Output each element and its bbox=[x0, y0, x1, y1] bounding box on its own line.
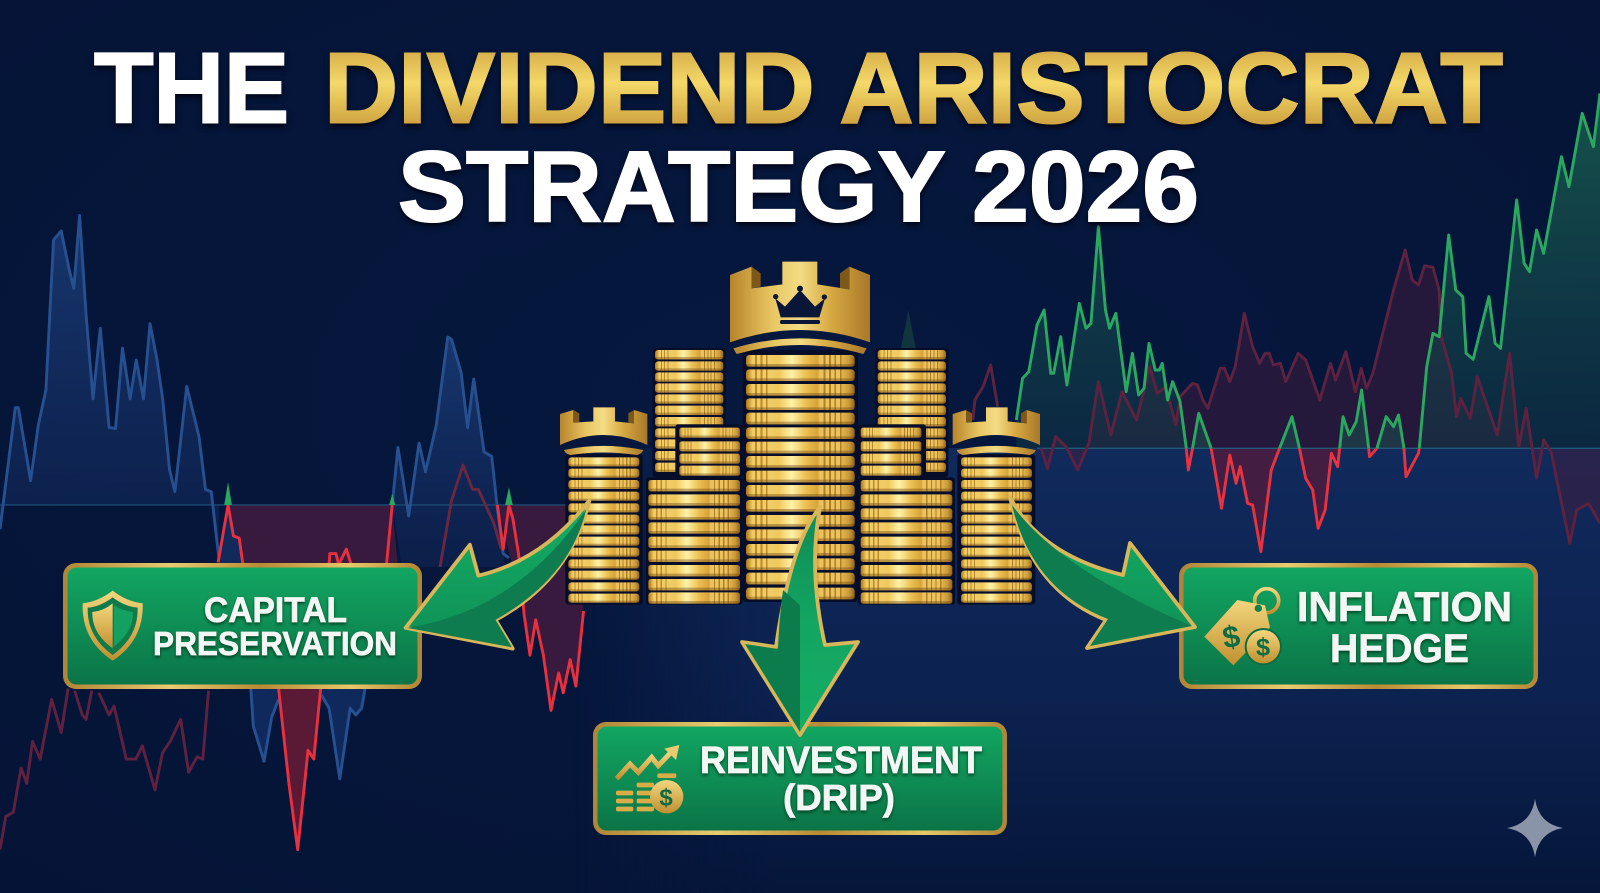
blue line lower bbox=[251, 686, 365, 779]
right tower battlement bbox=[953, 407, 1040, 445]
dim red line lower left bbox=[0, 688, 209, 850]
arrow: to inflation hedge bbox=[1010, 497, 1195, 648]
red zone fill bbox=[226, 505, 398, 567]
panel: inflation hedge bbox=[1179, 563, 1538, 689]
icon: price tag and coin: $ bbox=[1256, 634, 1270, 662]
right market chart bbox=[973, 93, 1600, 552]
dim red line upper bbox=[440, 465, 501, 567]
label: reinvestment drip: REINVESTMENT bbox=[700, 740, 982, 782]
icon: sparkle watermark bbox=[1507, 799, 1563, 857]
label: reinvestment drip bbox=[700, 740, 982, 818]
green mid area fill bbox=[1193, 390, 1404, 448]
central battlement crown bbox=[730, 262, 870, 342]
gold coin castle bbox=[560, 262, 1040, 605]
bright red line segments bbox=[1186, 448, 1419, 552]
icon: growth arrow and coins bbox=[616, 745, 683, 813]
icon: growth arrow and coins: $ bbox=[659, 784, 673, 811]
zero line left bbox=[0, 504, 570, 506]
label: reinvestment drip: (DRIP) bbox=[783, 777, 895, 818]
central coin tower bbox=[730, 262, 870, 602]
arrow: to capital preservation bbox=[406, 501, 589, 649]
left back coin stack bbox=[653, 348, 726, 477]
icon: price tag and coin bbox=[1204, 589, 1282, 665]
right small coin stack bbox=[858, 424, 926, 478]
right small tower bbox=[953, 407, 1040, 605]
left large coin stack bbox=[646, 477, 743, 605]
dim red line bbox=[1041, 250, 1600, 543]
crown emblem bbox=[773, 286, 827, 324]
right large coin stack bbox=[858, 477, 955, 605]
lower blue background zone bbox=[635, 448, 1600, 851]
left small coin stack bbox=[675, 424, 743, 478]
title word: THE: THE bbox=[94, 32, 289, 144]
green line segments bbox=[1016, 93, 1600, 448]
left small tower bbox=[560, 407, 647, 605]
dim red area fill bbox=[1041, 250, 1600, 543]
icon: price tag and coin: $ bbox=[1220, 619, 1243, 656]
central red lower fill bbox=[277, 686, 321, 850]
label: capital preservation bbox=[153, 591, 397, 662]
green area fill bbox=[1016, 93, 1600, 448]
red zone fill right bbox=[497, 505, 584, 710]
left tower shadow faces bbox=[573, 410, 634, 423]
icon: shield bbox=[83, 591, 143, 661]
label: capital preservation: CAPITAL bbox=[204, 591, 347, 630]
blue area fill bbox=[0, 215, 219, 558]
faint teal spike behind castle bbox=[901, 310, 916, 350]
left tower battlement bbox=[560, 407, 647, 445]
left market chart bbox=[0, 215, 584, 850]
label: inflation hedge: HEDGE bbox=[1330, 627, 1469, 671]
title bbox=[94, 32, 1503, 243]
blue line peak one bbox=[0, 215, 219, 558]
red dips fill bbox=[1211, 448, 1340, 552]
merlon shadow faces bbox=[752, 267, 849, 289]
title line two: STRATEGY 2026: STRATEGY 2026 bbox=[398, 131, 1199, 243]
right tower flange bbox=[957, 446, 1036, 455]
title words: DIVIDEND ARISTOCRAT: DIVIDEND ARISTOCRAT bbox=[324, 32, 1503, 144]
bright red lower spike bbox=[279, 688, 321, 850]
small blue fill bbox=[218, 509, 243, 567]
green spike marks bbox=[224, 482, 513, 505]
label: inflation hedge: INFLATION bbox=[1297, 583, 1512, 630]
panel: capital preservation bbox=[63, 563, 422, 689]
label: inflation hedge bbox=[1297, 583, 1512, 671]
arrow: to reinvestment bbox=[742, 507, 858, 735]
left tower flange bbox=[564, 446, 643, 455]
dim red peak behind tower bbox=[973, 365, 998, 420]
bright red lines bbox=[218, 505, 584, 710]
zero line right bbox=[1037, 447, 1600, 449]
blue line peak two bbox=[392, 337, 509, 558]
right tower shadow faces bbox=[966, 410, 1027, 423]
right back coin stack bbox=[875, 348, 948, 477]
panel: reinvestment bbox=[593, 722, 1007, 835]
label: capital preservation: PRESERVATION bbox=[153, 625, 397, 662]
central blue lower fill bbox=[251, 686, 365, 779]
second blue area fill bbox=[392, 337, 505, 567]
central flange bbox=[733, 338, 867, 354]
